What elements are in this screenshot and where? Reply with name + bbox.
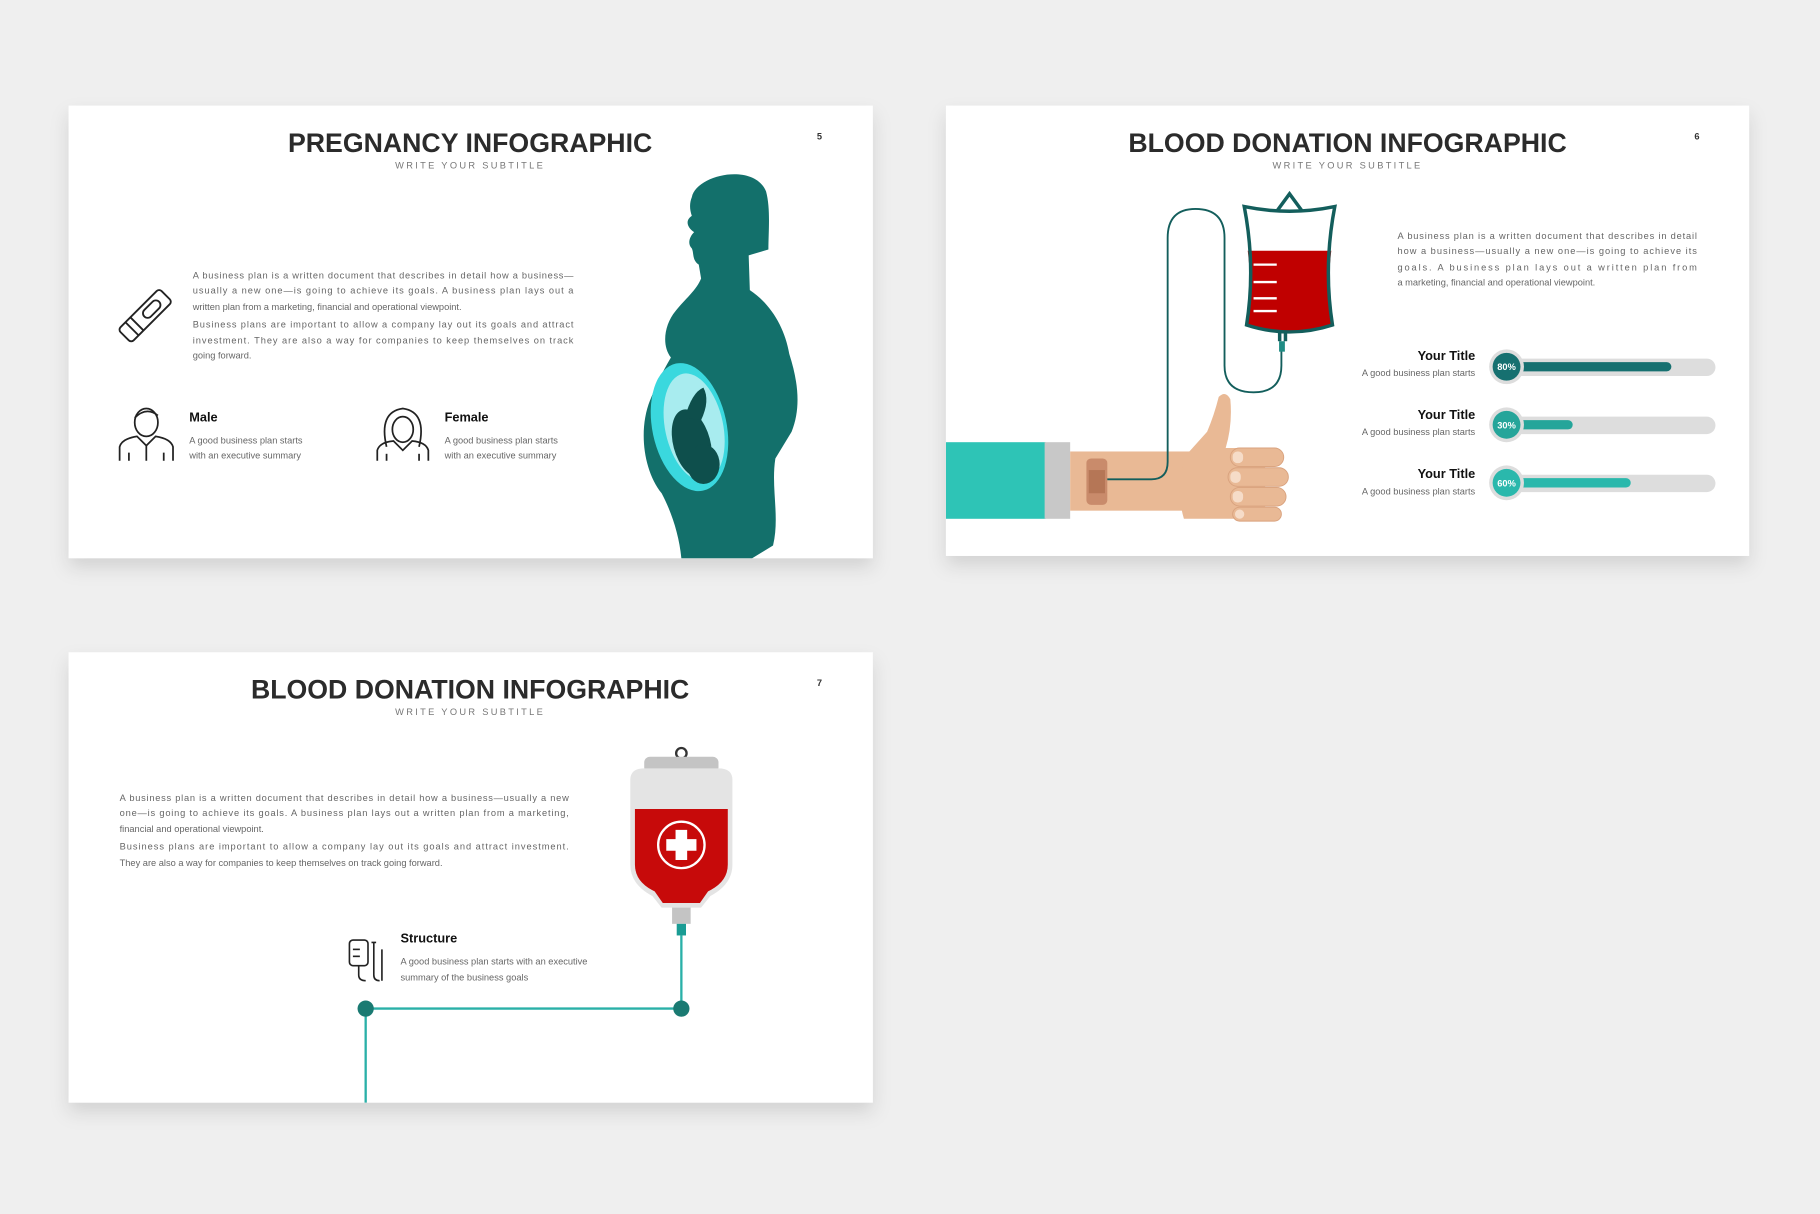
illustration: IV blood bag [630,748,732,935]
progress row 60%: 60% [1497,478,1516,488]
title: PREGNANCY INFOGRAPHIC [288,128,652,158]
icon: blood bag [1244,194,1335,352]
text block: description: They are also a way for companies to keep themselves on track going forward. [120,858,443,868]
text block: description [120,793,569,868]
timeline line [366,935,681,1103]
text block: description: goals. A business plan lays out a written plan from [1397,262,1697,272]
panel: blood donation structure slide [69,652,873,1103]
progress row 80%: A good business plan starts [1362,368,1476,378]
structure label: Structure [400,930,457,945]
page number: 6 [1694,131,1699,141]
illustration: pregnant woman silhouette [640,174,798,558]
text block: description: A business plan is a written document that describes in detail [1397,231,1697,241]
structure label: summary of the business goals [400,973,529,983]
progress row 60% [1362,465,1715,500]
subtitle: WRITE YOUR SUBTITLE [395,160,545,170]
female label: Female [445,409,489,424]
progress row 30%: A good business plan starts [1362,427,1476,437]
text block: description [192,271,574,361]
progress row 60%: A good business plan starts [1362,486,1476,496]
icon: male [120,409,173,461]
structure label: A good business plan starts with an executive [400,956,587,966]
text block: description: financial and operational viewpoint. [120,824,264,834]
text block: description [1397,231,1697,288]
icon: female [377,409,428,461]
title: BLOOD DONATION INFOGRAPHIC [251,675,689,705]
icon: pregnancy test [118,289,172,343]
progress row 80%: 80% [1497,362,1516,372]
text block: description: investment. They are also a way for companies to keep themselves on track [193,336,574,346]
panel: pregnancy slide [69,106,873,558]
page number: 5 [817,131,822,141]
male label: A good business plan starts [189,435,303,445]
progress row 80%: Your Title [1418,348,1475,363]
male label: Male [189,409,218,424]
text block: description: written plan from a marketing, financial and operational viewpoint. [192,302,462,312]
panel: blood donation progress slide [946,106,1749,556]
text block: description: one—is going to achieve its goals. A business plan lays out a written plan from a marketing, [120,808,569,818]
text block: description: A business plan is a written document that describes in detail how a business— [193,271,574,281]
subtitle: WRITE YOUR SUBTITLE [395,707,545,717]
icon: IV drip [349,940,382,981]
text block: description: how a business—usually a new one—is going to achieve its [1397,246,1697,256]
progress row 30%: 30% [1497,420,1516,430]
text block: description: usually a new one—is going to achieve its goals. A business plan lays out a [193,286,574,296]
female label [444,409,558,460]
text block: description: Business plans are important to allow a company lay out its goals and attract investment. [120,842,569,852]
structure label [400,930,587,983]
female label: A good business plan starts [445,435,558,445]
progress row 80% [1362,348,1715,384]
page number: 7 [817,678,822,688]
text block: description: going forward. [193,351,251,361]
male label [188,409,303,460]
timeline dots [358,1000,689,1017]
title: BLOOD DONATION INFOGRAPHIC [1128,128,1567,158]
progress row 60%: Your Title [1418,466,1475,481]
progress row 30%: Your Title [1418,407,1475,422]
progress row 30% [1362,407,1715,442]
text block: description: A business plan is a written document that describes in detail how a business—usually a new [120,793,569,803]
text block: description: a marketing, financial and operational viewpoint. [1397,278,1595,288]
tube [1107,209,1281,479]
text block: description: Business plans are important to allow a company lay out its goals and attract [193,319,574,329]
illustration: arm with thumb up [946,394,1288,521]
subtitle: WRITE YOUR SUBTITLE [1273,160,1423,170]
female label: with an executive summary [444,450,557,460]
male label: with an executive summary [188,450,301,460]
